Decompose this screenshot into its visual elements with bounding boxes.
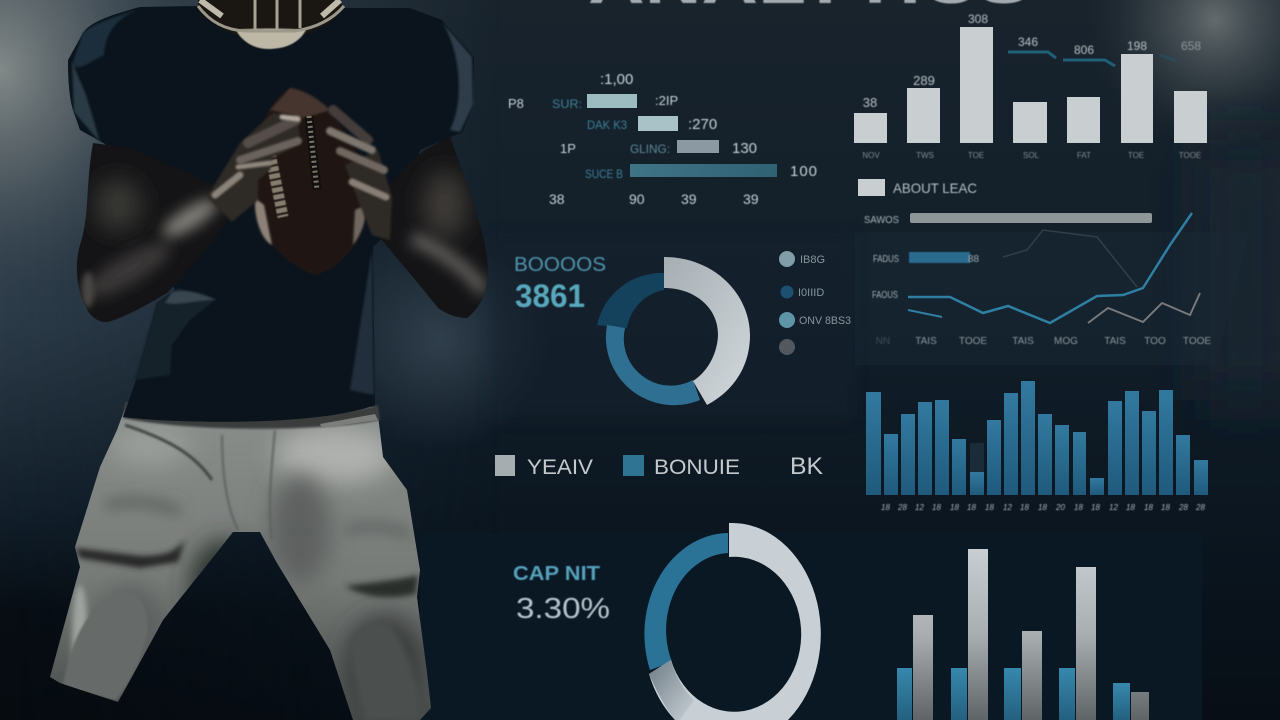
column chart: axis labels: TOE (968, 151, 984, 160)
column chart: axis labels: NOV (862, 151, 880, 160)
blue bars: rotated tick labels: 18 (1020, 503, 1029, 512)
line chart: axis labels: TOOE (1183, 336, 1211, 347)
donut: heading (514, 254, 606, 314)
blue bars: rotated tick labels (881, 503, 1205, 512)
bar chart: labels and values: 39 (681, 191, 697, 207)
blue bars: rotated tick labels: 18 (1038, 503, 1047, 512)
player: pants (50, 397, 431, 720)
line chart: series labels: FAOUS (872, 290, 898, 301)
column chart: axis labels (862, 151, 1201, 160)
bar chart: category names: SUCE B (585, 167, 623, 181)
blue bars: rotated tick labels: 18 (985, 503, 994, 512)
grouped bars: grey (913, 549, 1149, 720)
line chart (864, 213, 1211, 347)
column chart: columns (854, 27, 1207, 143)
column chart: axis labels: TWS (916, 151, 934, 160)
line chart: axis labels: TAIS (915, 336, 937, 347)
bar chart: labels and values: P8 (508, 96, 524, 111)
blue bars (866, 381, 1208, 495)
donut: bottom legend: BK (790, 453, 823, 480)
column chart: values: 658 (1181, 39, 1201, 53)
top column chart (854, 12, 1207, 196)
player: jersey (68, 6, 474, 422)
blue bars: rotated tick labels: 28 (897, 503, 907, 512)
knee pads (62, 604, 147, 700)
column chart: axis labels: SOL (1023, 151, 1040, 160)
large donut chart (644, 523, 821, 720)
blue bar chart (866, 381, 1208, 512)
line chart: axis labels (876, 336, 1211, 347)
panel: line chart backdrop (855, 232, 1250, 365)
line chart: axis labels: TAIS (1012, 336, 1034, 347)
cap figure: 3.30% (516, 593, 610, 625)
football laces (309, 116, 317, 190)
donut chart (597, 257, 750, 405)
column chart: values: 289 (913, 73, 935, 88)
player: helmet facemask (198, 0, 344, 49)
column chart: axis labels: TOOE (1179, 151, 1201, 160)
bar chart: labels and values: 38 (549, 191, 565, 207)
line chart: axis labels: NN (876, 336, 890, 347)
line chart: axis labels: TOOE (959, 336, 987, 347)
blue bars: rotated tick labels: 20 (1055, 503, 1065, 512)
bar chart: labels and values: 100 (790, 163, 818, 180)
line chart: series labels: FADUS (873, 254, 899, 265)
cap figure (513, 563, 610, 625)
bar chart: labels and values: :270 (688, 116, 717, 133)
donut: heading: 3861 (515, 278, 585, 314)
blue bars: rotated tick labels: 18 (1091, 503, 1100, 512)
thigh pad left (105, 502, 180, 512)
donut: heading: BOOOOS (514, 254, 606, 276)
column chart: values: 198 (1127, 39, 1147, 53)
line chart: header bar (864, 213, 1152, 226)
bottom grouped bar chart (897, 549, 1149, 720)
grouped bars: blue (897, 668, 1130, 720)
blue bars: rotated tick labels: 28 (1178, 503, 1188, 512)
donut panel (495, 251, 851, 480)
blue bars: rotated tick labels: 18 (967, 503, 976, 512)
blue bars: rotated tick labels: 18 (1161, 503, 1170, 512)
column chart: values (863, 12, 1201, 110)
icon: football (253, 88, 368, 275)
line chart: axis labels: TAIS (1104, 336, 1126, 347)
bar chart: category names: GLING: (630, 142, 670, 156)
column chart: values: 38 (863, 95, 877, 110)
donut: legend: IB8G (800, 254, 825, 266)
blue bars: rotated tick labels: 12 (1003, 503, 1012, 512)
donut: legend (779, 251, 851, 355)
blue bars: rotated tick labels: 18 (932, 503, 941, 512)
blue bars: rotated tick labels: 18 (1144, 503, 1153, 512)
bar chart: labels and values: :2IP (655, 93, 678, 108)
blue bars: rotated tick labels: 12 (1109, 503, 1118, 512)
cap figure: CAP NIT (513, 563, 600, 585)
blue bars: rotated tick labels: 18 (1126, 503, 1135, 512)
column chart: axis labels: FAT (1077, 151, 1091, 160)
player: hands (207, 110, 392, 240)
bar chart: category names (552, 97, 670, 181)
blue bars: rotated tick labels: 28 (1195, 503, 1205, 512)
bar chart: category names: DAK K3 (587, 118, 627, 132)
donut: legend: I0IIID (798, 287, 824, 299)
column chart: values: 308 (968, 12, 988, 26)
column chart: values: 806 (1074, 43, 1094, 57)
bar chart: bars (587, 94, 777, 177)
donut: bottom legend: YEAIV (527, 456, 593, 479)
player: right arm (380, 136, 488, 318)
column chart: legend: ABOUT LEAC (893, 180, 977, 196)
blue bars: rotated tick labels: 18 (950, 503, 959, 512)
line chart: series lines (908, 213, 1200, 323)
column chart: values: 346 (1018, 35, 1038, 49)
bar chart: labels and values: 1P (560, 141, 576, 156)
column chart: axis labels: TOE (1128, 151, 1144, 160)
column chart: legend (858, 179, 977, 196)
blue bars: rotated tick labels: 18 (1074, 503, 1083, 512)
donut: bottom legend (495, 453, 823, 480)
thigh pad right (345, 527, 410, 535)
blue bars: rotated tick labels: 18 (881, 503, 890, 512)
panel: bottom dashboard (420, 533, 1202, 720)
bar chart: labels and values: 39 (743, 191, 759, 207)
horizontal bar chart (508, 71, 818, 207)
column chart: teal trend marks (1008, 52, 1176, 66)
line chart: series labels (872, 252, 980, 301)
bar chart: labels and values: :1,00 (600, 71, 633, 88)
line chart: series labels: 88 (968, 254, 980, 265)
bar chart: category names: SUR: (552, 97, 582, 111)
line chart: axis labels: TOO (1144, 336, 1166, 347)
bar chart: labels and values: 90 (629, 191, 645, 207)
donut: legend: ONV 8BS3 (799, 315, 851, 327)
panel: donut backdrop (490, 235, 855, 420)
player: left arm (77, 143, 232, 322)
bar chart: labels and values (508, 71, 818, 207)
line chart: header bar: SAWOS (864, 215, 899, 226)
blue bars: rotated tick labels: 12 (915, 503, 924, 512)
line chart: axis labels: MOG (1054, 336, 1078, 347)
player figure (50, 0, 488, 720)
donut: bottom legend: BONUIE (654, 456, 740, 479)
bar chart: labels and values: 130 (732, 140, 757, 157)
